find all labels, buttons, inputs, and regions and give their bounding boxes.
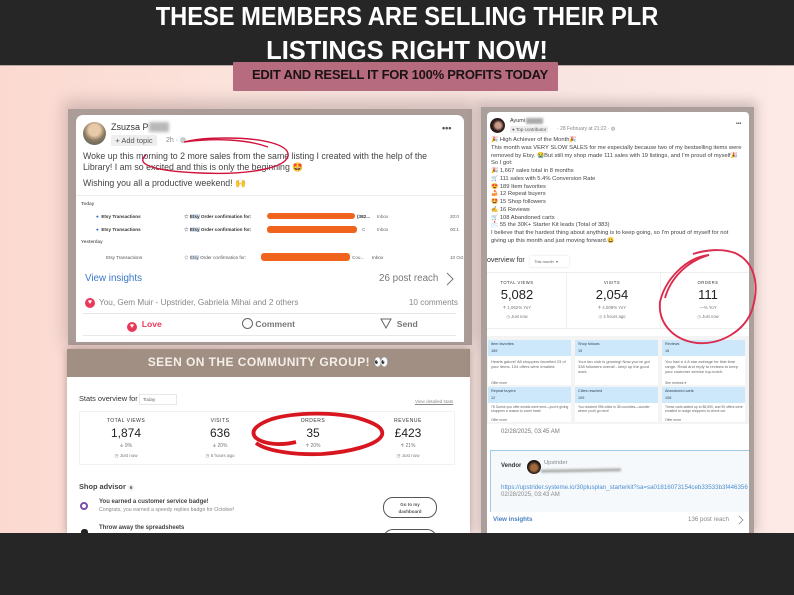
stat: orders: 🡩 20% [306,443,320,449]
reactions row [85,298,458,308]
email row 1: ☆ Etsy Order confirmation for: [184,214,251,219]
card: repeat buyers [488,387,571,422]
yesterday label: Yesterday [81,239,103,244]
stat cards grid [487,336,749,424]
card: cities reached [575,387,658,422]
love action: Love [142,319,162,329]
card: reviews: 16 [665,348,669,352]
email row 3: Etsy Transactions [106,255,142,260]
stat: total views: 🡫 9% [120,443,132,449]
post wish line: Wishing you all a productive weekend! 🙌 [83,178,246,188]
email row 2 [96,226,459,233]
post text: 🤩 15 Shop followers [491,199,546,205]
card: shop follows [575,340,658,385]
title: THESE MEMBERS ARE SELLING THEIR PLR [156,1,658,31]
title: LISTINGS RIGHT NOW! [266,35,548,65]
stat: total views [500,280,534,319]
detailed stats link: View detailed stats [415,399,453,404]
heart reaction: ♥ [88,299,92,306]
card: repeat buyers: 12 [491,396,495,400]
view insights link: View insights [85,273,142,284]
post reach: 26 post reach [379,273,438,284]
stat: orders: 111 [698,287,718,302]
stat: orders: 35 [306,426,320,440]
icon: advisor 2 [81,529,88,533]
post text [491,136,742,244]
reaction names: You, Gem Muir - Upstrider, Gabriela Mihai and 2 others [99,298,298,307]
card: abandoned carts: Abandoned carts [665,389,694,393]
post text: 📩 55 the 30K+ Starter Kit leads (Total of 383) [491,222,610,228]
card: cities reached: You reached 996 cities in 38 countries—wonder where you'll go next! [578,405,650,413]
community heading: SEEN ON THE COMMUNITY GROUP! 👀 [148,355,389,369]
email row 1: ● Etsy Transactions [96,214,141,219]
post text: I believe that the hardest thing about anything is to keep going, so I'm proud of myself for not [491,230,728,236]
card: abandoned carts [662,387,745,422]
card: shop follows: Shop follows [578,342,600,346]
dashboard button [383,497,437,518]
stats heading: Stats overview for [79,394,138,403]
post card [487,112,749,533]
stat: total views: TOTAL VIEWS [107,418,145,424]
email row 1: (382... [357,214,370,219]
period dropdown [139,394,177,405]
stat: orders: —% YoY [699,305,717,310]
card: abandoned carts: 108 [665,396,671,400]
stat: revenue: REVENUE [394,418,422,424]
overview heading: overview for [487,257,525,264]
card: repeat buyers: 78 Guess you offer emails were sent—you're giving shoppers a reason to come back! [491,405,568,413]
email row 1 [96,213,459,219]
vendor name: Upstrider [544,460,568,466]
post text: 🎉 High Achiever of the Month🎉 [491,137,577,143]
post text: Library! I am so excited and this is only the beginning 🤩 [83,162,303,172]
stat: orders: ORDERS [698,280,718,285]
email row 2: Inbox [377,227,388,232]
panel: community group stats [67,349,470,533]
email row 3: Inbox [372,255,383,260]
stat: revenue [394,418,422,458]
card: repeat buyers: Repeat buyers [491,389,516,393]
vendor box [490,450,749,512]
contributor badge [510,126,548,133]
card: repeat buyers: Offer more [491,418,507,422]
page background [0,66,794,533]
post reach: 136 post reach [688,516,729,523]
comment action: Comment [255,319,295,329]
post date: · 28 February at 21:22 · ◍ [557,126,615,132]
vendor date: 02/28/2025, 03:43 AM [501,492,560,498]
post text: removed by Etsy. 😭But still my shop made 111 sales with 19 listings, and I'm proud of myself🎉 [491,153,738,159]
panel: Zsuzsa post [68,109,472,345]
stat: total views: 5,082 [501,287,533,302]
stat: visits: VISITS [604,280,620,285]
email list [81,201,464,261]
post text [83,151,427,172]
email row 2: 00:1 [450,227,459,232]
card: reviews: You had a 4.8 star average for that time range. Read and reply to reviews to keep your customer service top-notch. [665,359,738,374]
stat: visits: 🡫 20% [212,443,228,449]
post text: ✍️ 16 Reviews [491,207,530,213]
advisor item 2: Throw away the spreadsheets [99,525,184,531]
card: abandoned carts: These carts added up to $5,690, and 90 offers were emailed to nudge shoppers to check out. [665,405,743,413]
card: cities reached: Cities reached [578,389,602,393]
subtitle banner: EDIT AND RESELL IT FOR 100% PROFITS TODAY [252,67,548,82]
card: item favorites: Item favorites [491,342,514,346]
stat: visits: 2,054 [596,287,628,302]
card: item favorites: Offer more [491,381,507,385]
card: shop follows: Your fan club is growing! Now you've got 338 followers overall - keep up the good work. [578,359,650,374]
author name: Zsuzsa Phyllis [111,122,169,132]
stats table [79,411,455,465]
post text: 🎉 1,667 sales total in 8 months [491,168,574,174]
panel: Ayumi post [481,107,754,533]
post text: So I got: [491,160,513,166]
add topic tag: + Add topic [115,136,153,145]
email row 3: ☆ Etsy Order confirmation for: [184,255,246,260]
love action: ♥ [130,323,134,330]
subtitle banner [233,62,558,91]
stat: total views: 1,874 [111,426,141,440]
author name: Ayumi Mitchel [510,118,543,124]
icon: red circle around post text [142,137,289,174]
stat: total views [106,418,145,458]
top banner [0,0,794,66]
stat: visits: 🡩 4,008% YoY [598,305,626,310]
action bottom divider [83,335,456,336]
email row 1: 20:0 [450,214,459,219]
stat: orders: ◷ Just now [697,314,719,319]
email row 3: 10 Oct [450,255,464,260]
stat: orders [697,280,719,319]
chevron [446,272,454,286]
vendor avatar [527,460,541,474]
post text: 🛒 108 Abandoned carts [491,215,555,221]
stat: orders [301,418,325,449]
comment count: 10 comments [409,298,458,307]
order date 1: 02/28/2025, 03:45 AM [501,429,560,435]
post time: 2h · ◍ [166,137,186,144]
stat: revenue: £423 [395,426,421,440]
dashboard button: dashboard [398,509,422,514]
redacted email [541,468,621,473]
more menu: ••• [736,121,741,127]
card: reviews: Reviews [665,342,679,346]
advisor item 1: You earned a customer service badge! [99,499,209,505]
send action [380,318,418,329]
stat: orders: ORDERS [301,418,325,424]
divider [76,195,464,196]
vendor link: https://upstrider.systeme.io/30plusplan_starterkit?sa=sa01816073154ceb33533b3f446356 [501,484,748,491]
email row 2: ● Etsy Transactions [96,227,141,232]
heart reaction [85,298,95,308]
stat: total views: ◷ Just now [115,453,137,458]
card: item favorites: 189 [491,348,497,352]
stat: total views: 🡩 1,062% YoY [503,305,531,310]
stat: revenue: 🡩 21% [400,443,416,449]
stat: total views: ◷ Just now [506,314,528,319]
view insights link: View insights [493,516,532,523]
post text: giving up this month and just moving forward.😀 [491,238,615,244]
icon: red circle around orders right [658,249,757,344]
contributor badge: ● Top contributor [512,127,546,132]
stat: visits: VISITS [211,418,229,424]
post text: This month was VERY SLOW SALES for me especially because two of my bestselling items were [491,145,741,151]
comment action [242,318,295,329]
overview dropdown: This month ▾ [534,259,558,264]
more menu: ••• [442,123,451,133]
card: cities reached: 109 [578,396,584,400]
add topic tag [111,135,157,146]
avatar [83,122,106,145]
stat: total views: TOTAL VIEWS [500,280,534,285]
icon: red circle around orders [252,412,384,456]
card: reviews: See reviews ▾ [665,381,686,385]
email row 3 [106,253,464,261]
card: abandoned carts: Offer more [665,418,681,422]
stat: visits: ◷ 5 hours ago [206,453,234,458]
second button [383,529,437,539]
email row 3: Cou... [352,255,364,260]
period dropdown: Today [143,397,155,402]
action divider [83,313,456,314]
post text: 🛒 111 sales with 5.4% Conversion Rate [491,176,595,182]
today label: Today [81,201,94,206]
avatar [490,118,505,133]
post text: Woke up this morning to 2 more sales from the same listing I created with the help of the [83,151,427,161]
overview table [487,272,749,329]
vendor label: Vendor [501,463,521,469]
card: shop follows: 15 [578,348,582,352]
stat: revenue: ◷ Just now [397,453,419,458]
shop advisor heading: Shop advisor 6 [79,482,132,491]
stat: visits: ◷ 4 hours ago [599,314,625,319]
send action: Send [397,319,418,329]
bottom band [0,533,794,595]
advisor item 1 description: Congrats, you earned a speedy replies badge for October! [99,507,234,513]
stat: visits: 636 [210,426,230,440]
card: reviews [662,340,745,385]
community heading [67,349,470,377]
email row 2: ☆ Etsy Order confirmation for: [184,227,251,232]
stat: visits [596,280,628,319]
email row 2: C [362,227,365,232]
chevron [738,516,744,524]
post text: 🍰 12 Repeat buyers [491,191,546,197]
icon: badge [80,502,88,510]
card: item favorites [488,340,571,385]
love action [127,319,162,332]
post text: 😍 189 Item favorites [491,184,546,190]
email row 1: Inbox [377,214,388,219]
dashboard button: Go to my [400,502,420,507]
stat: visits [206,418,234,458]
card: item favorites: Hearts galore! 88 shoppers favorited 23 of your items. 104 offers were emailed. [491,359,566,369]
overview dropdown [530,256,569,267]
title [156,1,658,65]
post card [76,115,464,342]
